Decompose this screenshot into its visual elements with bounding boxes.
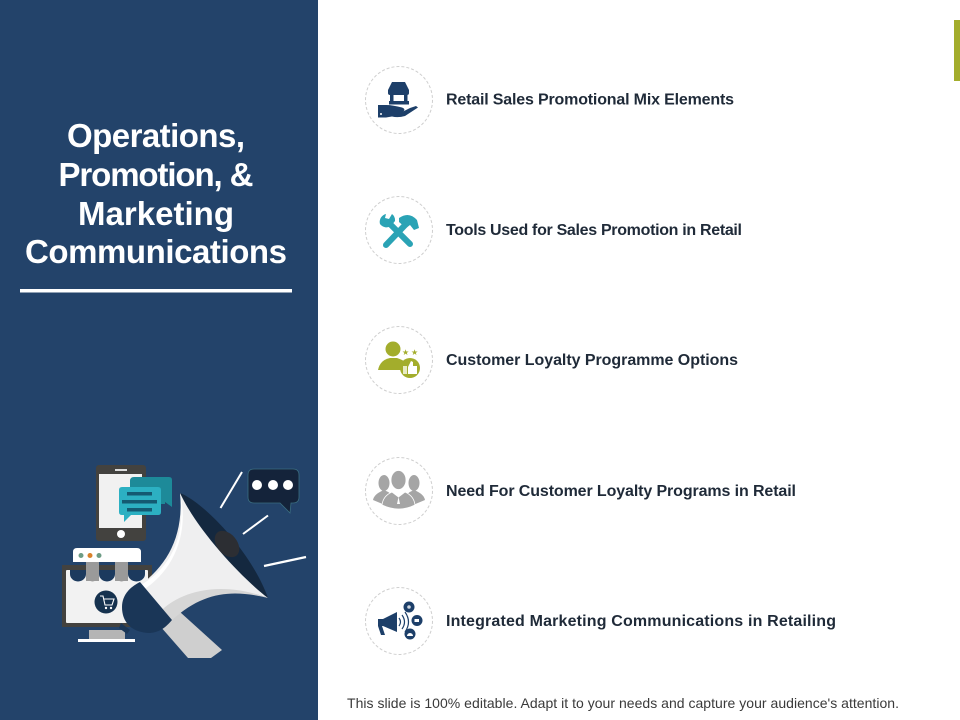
accent bar: top right xyxy=(954,20,960,81)
item 5: integrated marketing communications xyxy=(366,588,836,654)
icon: crossed wrench and hammer xyxy=(366,196,432,264)
icon: shopping cart xyxy=(94,590,118,614)
icon: shop on hand xyxy=(366,66,432,134)
item 4: need for customer loyalty programs xyxy=(366,458,796,524)
label: Integrated Marketing Communications in Retailing xyxy=(446,613,836,630)
icon: smartphone xyxy=(96,465,146,541)
icon: speech bubble with dots xyxy=(248,469,299,513)
icon: megaphone with media circles xyxy=(366,588,432,654)
item 3: customer loyalty programme options xyxy=(366,326,738,394)
item 2: tools used for sales promotion xyxy=(366,196,742,264)
icon: chat bubbles xyxy=(119,477,172,522)
illustration: megaphone with phone and shop xyxy=(62,465,306,658)
label: Customer Loyalty Programme Options xyxy=(446,352,738,369)
megaphone rim xyxy=(180,493,268,598)
icon: user with stars and thumb xyxy=(366,326,432,394)
megaphone handle xyxy=(160,612,222,658)
title: Promotion, & xyxy=(58,156,254,193)
title xyxy=(25,117,287,270)
title underline xyxy=(20,289,292,292)
label: Tools Used for Sales Promotion in Retail xyxy=(446,222,742,239)
megaphone rear cap xyxy=(122,582,172,633)
title: Marketing xyxy=(78,195,234,232)
item 1: retail sales promotional mix xyxy=(366,66,734,134)
icon: group of people xyxy=(366,458,432,524)
icon: user with stars and thumb: ★ xyxy=(411,348,418,357)
label: Retail Sales Promotional Mix Elements xyxy=(446,92,734,108)
footer note: This slide is 100% editable. Adapt it to your needs and capture your audience's attention. xyxy=(347,695,899,711)
megaphone cone xyxy=(139,493,268,620)
icon: shop monitor xyxy=(62,548,152,642)
label: Need For Customer Loyalty Programs in Retail xyxy=(446,483,796,500)
sound line 3 xyxy=(264,557,306,566)
panel: left navy sidebar xyxy=(0,0,318,720)
sound line 1 xyxy=(220,472,242,508)
icon: user with stars and thumb: ★ xyxy=(402,348,409,357)
title: Communications xyxy=(25,233,287,270)
title: Operations, xyxy=(67,117,245,154)
sound line 2 xyxy=(243,516,268,534)
